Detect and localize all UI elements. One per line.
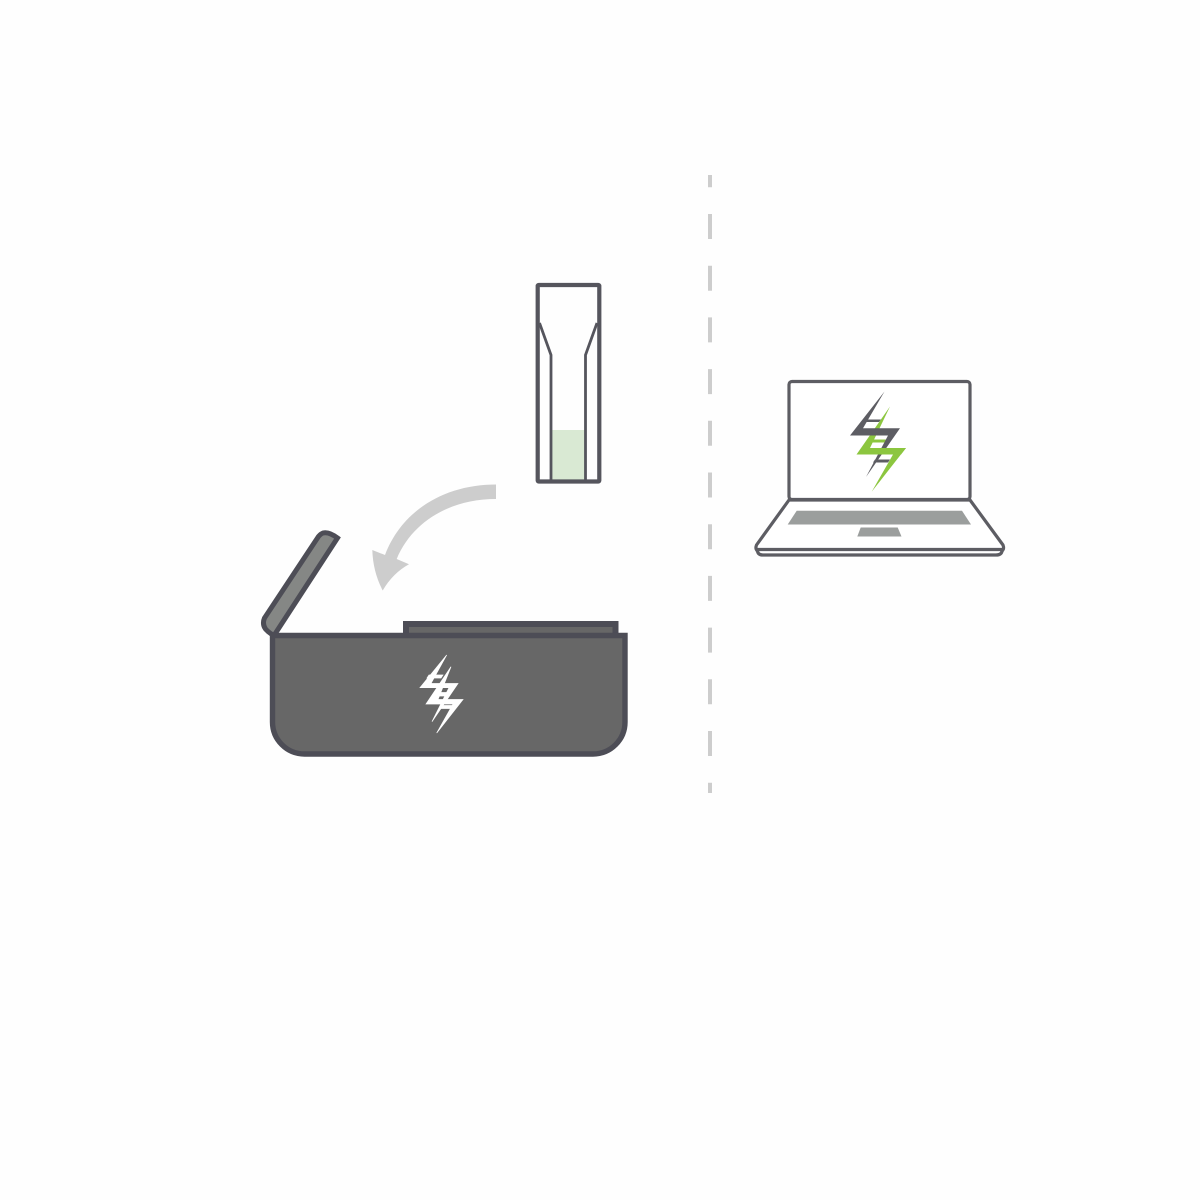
laptop trackpad bbox=[857, 528, 902, 536]
device body bbox=[272, 636, 625, 754]
icon: white bolt logo bbox=[420, 655, 463, 733]
cuvette outer frame bbox=[538, 285, 599, 482]
device bbox=[263, 533, 625, 754]
arrow: curved into device bbox=[372, 484, 496, 590]
device lid bbox=[263, 533, 338, 636]
laptop screen bbox=[789, 382, 970, 500]
laptop keyboard bbox=[788, 511, 971, 524]
laptop bbox=[756, 382, 1004, 555]
icon: gray and green bolt logo bbox=[850, 392, 906, 492]
divider: dashed line bbox=[708, 175, 712, 793]
device tray slot bbox=[406, 624, 616, 636]
laptop base bbox=[756, 500, 1004, 555]
cuvette inner walls bbox=[540, 323, 597, 481]
cuvette bbox=[538, 285, 599, 482]
cuvette liquid bbox=[551, 430, 585, 480]
